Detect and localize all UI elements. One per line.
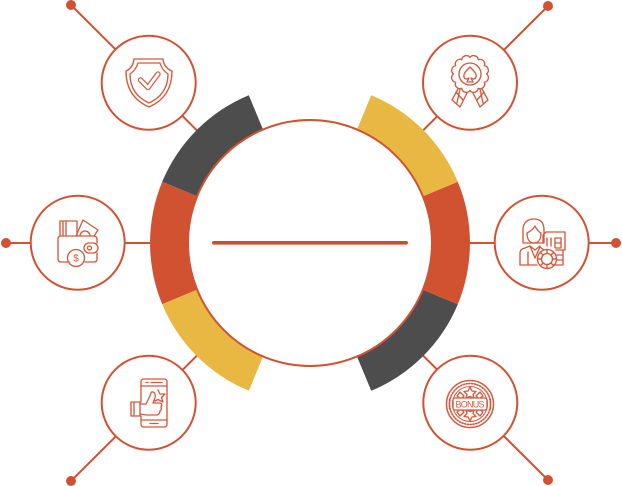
bonus label: BONUS <box>456 399 484 409</box>
icon circle: dealer <box>495 196 589 290</box>
icon: phone with thumb <box>131 379 167 427</box>
segmented ring <box>150 95 470 391</box>
icon circle: wallet <box>31 196 125 290</box>
icon circle: bonus <box>423 356 517 450</box>
central circle <box>188 120 432 366</box>
dollar sign: $ <box>73 254 79 264</box>
central divider bar <box>212 241 408 245</box>
icon: shield with check <box>126 59 172 107</box>
icon circle: thumbs up phone <box>102 356 196 450</box>
icon: dealer with chip <box>520 219 565 268</box>
icon circle: shield <box>102 36 196 130</box>
icon circle: award <box>423 36 517 130</box>
icon: spade rosette <box>452 56 488 107</box>
